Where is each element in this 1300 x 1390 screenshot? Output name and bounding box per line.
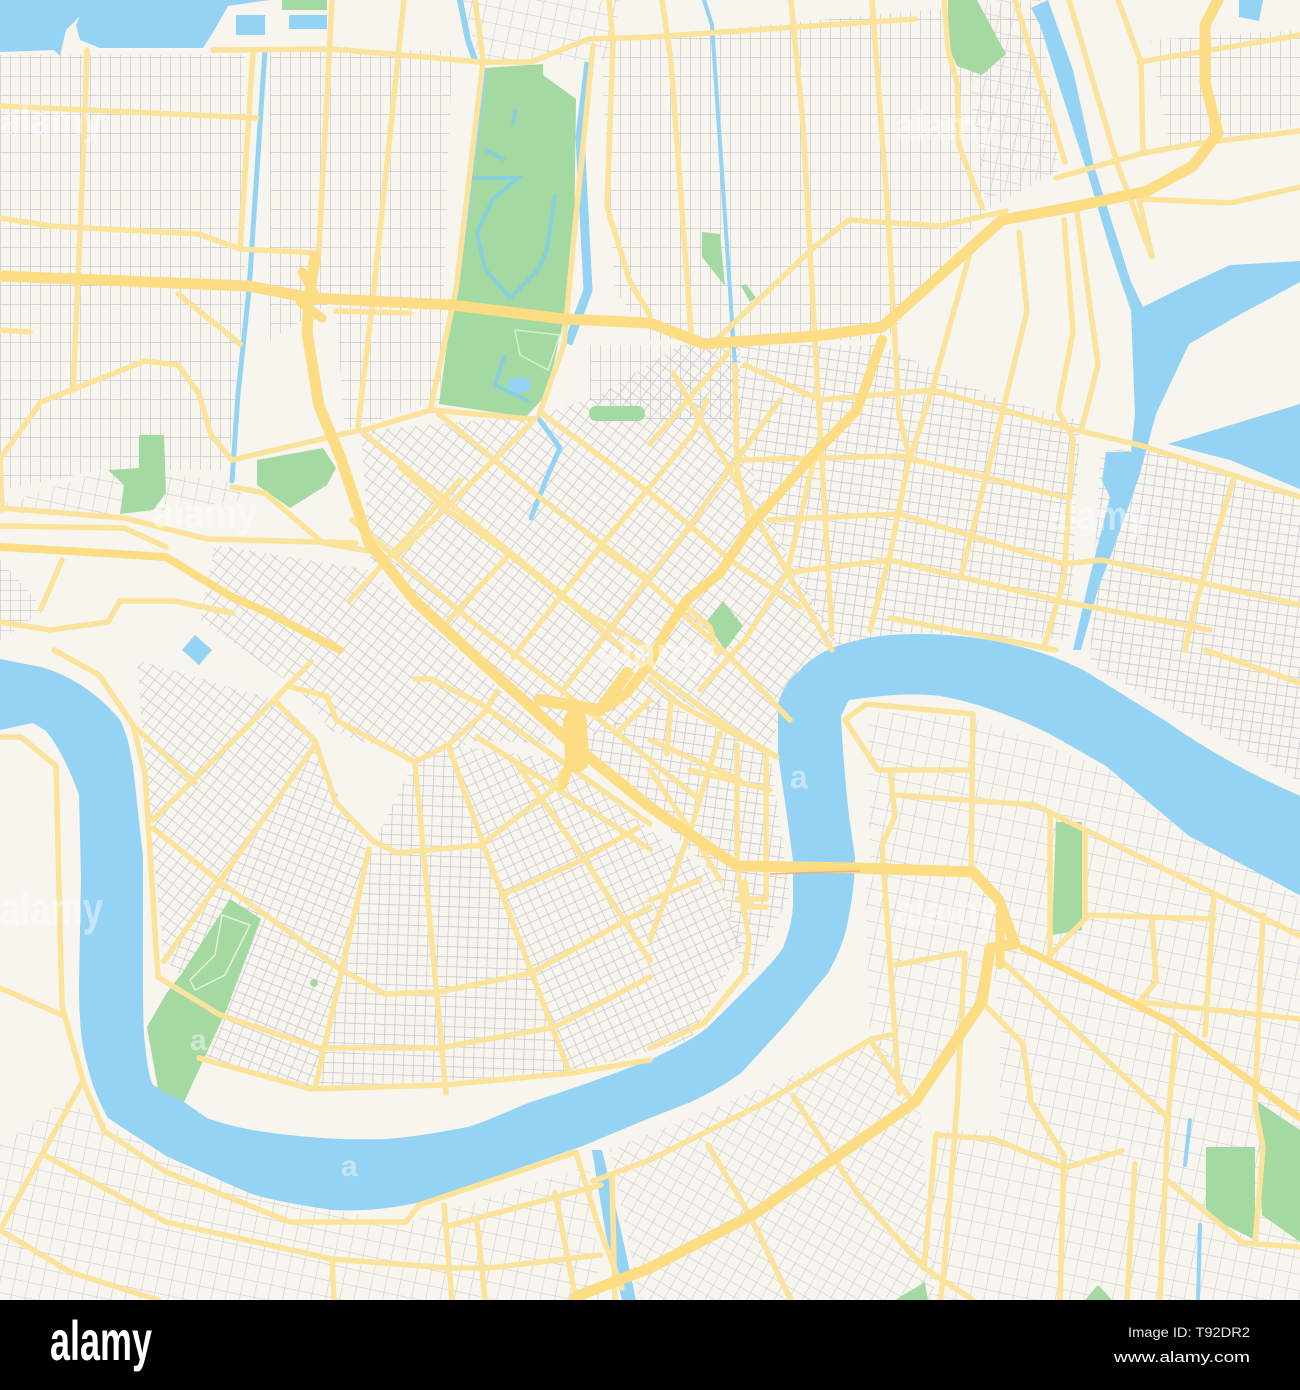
other interchanges (300, 272, 1000, 965)
watermarks: alamy (895, 102, 999, 149)
watermarks: alamy (0, 883, 103, 935)
watermarks: a (341, 1150, 358, 1183)
CBD interchange (540, 673, 627, 710)
CBD interchange core (575, 722, 577, 760)
footer bar (0, 1300, 1300, 1390)
watermarks: alamy (0, 97, 104, 144)
I-610 (0, 0, 1218, 344)
website: www.alamy.com (1113, 1349, 1250, 1366)
thin canals (232, 0, 1200, 1300)
watermarks: a (790, 759, 808, 795)
I-10 main (307, 257, 737, 866)
watermarks (0, 97, 1148, 1183)
I-10 east (607, 340, 882, 707)
park: City Park (439, 62, 589, 417)
park details (190, 915, 250, 990)
I-10 west rail spur (0, 547, 340, 650)
alamy logo: alamy (50, 1309, 152, 1372)
watermarks: alamy (153, 489, 258, 536)
watermarks: alamy (1048, 492, 1148, 539)
image id: Image ID: T92DR2 (1128, 1324, 1250, 1340)
watermarks: alamy (598, 629, 717, 676)
watermarks: alamy (895, 887, 999, 934)
Mississippi River (0, 634, 1300, 1210)
bridge and west bank expressway (575, 866, 1015, 1297)
watermarks: a (190, 1024, 207, 1057)
bridge median (770, 871, 860, 874)
